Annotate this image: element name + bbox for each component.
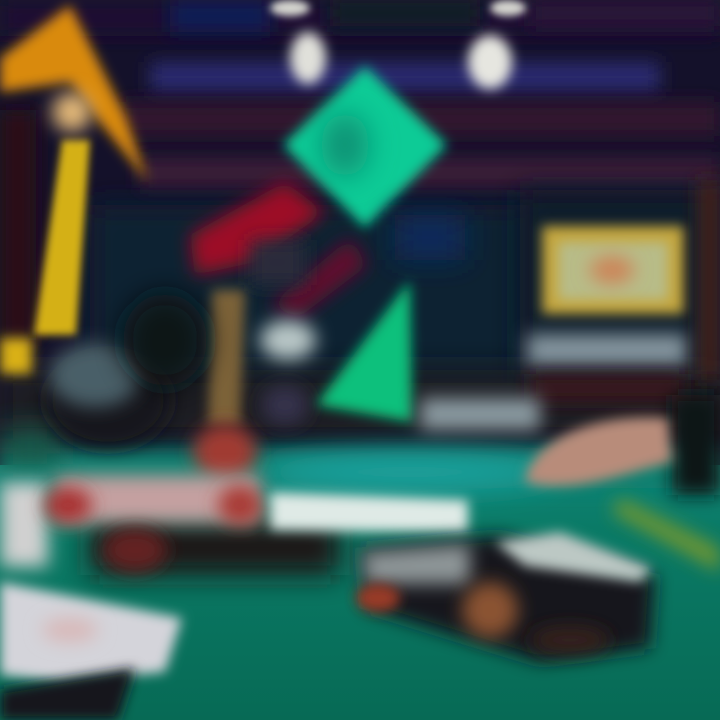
hand: dealer hand and sleeve	[525, 395, 720, 495]
icon: trophy stem	[193, 290, 316, 480]
lights: white hanging lamps	[270, 0, 526, 89]
line: gold table line	[612, 498, 720, 572]
icon: red spade shape	[190, 182, 368, 318]
chips: red and white stack	[0, 475, 340, 575]
icon: green triangle	[316, 215, 465, 422]
chips: dark stack right	[356, 532, 655, 662]
card: white card on table	[270, 492, 468, 533]
icon: teal diamond	[283, 66, 447, 228]
screen: wall monitor	[542, 226, 684, 314]
figure: dark seated silhouette	[46, 294, 207, 448]
panel: slot machine consoles	[420, 180, 720, 430]
card: white card bottom left	[0, 582, 182, 720]
table: green felt	[0, 428, 720, 720]
icon: yellow arrow	[0, 5, 148, 374]
